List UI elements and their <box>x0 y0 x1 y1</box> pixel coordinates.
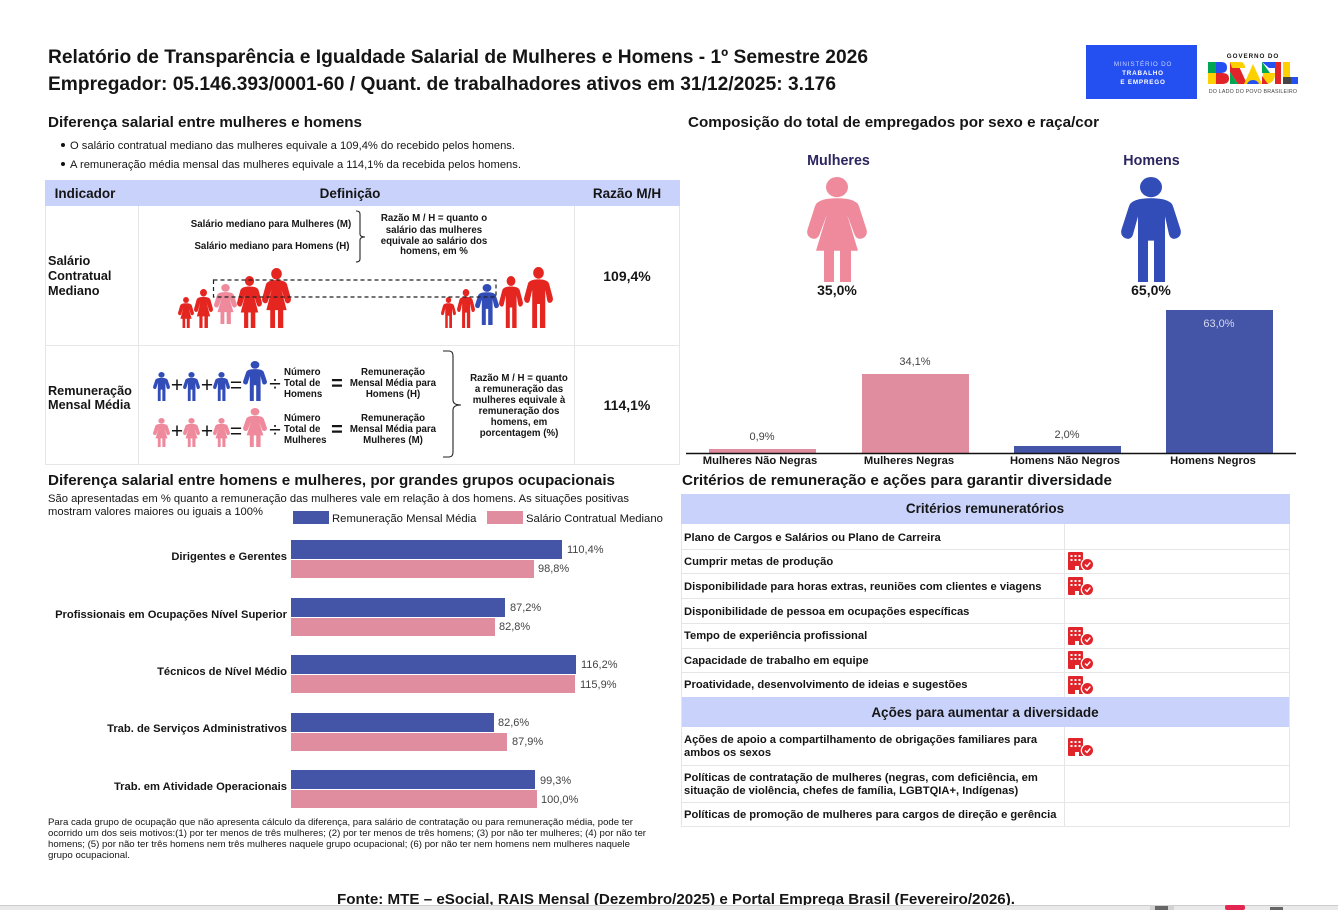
formula: homens: Remuneração <box>361 367 425 378</box>
formula: mulheres: + <box>171 420 183 443</box>
group: profissionais: Profissionais em Ocupações Nível Superior <box>55 609 288 621</box>
pictogram: mulheres 35,0%: Mulheres <box>807 153 870 169</box>
row label: salário contratual mediano: Mediano <box>48 284 100 298</box>
group: dirigentes e gerentes: Dirigentes e Gerentes <box>171 551 287 563</box>
bar chart: composição por raça/cor: Mulheres Não Negras <box>703 455 817 467</box>
legend: Remuneração Mensal Média <box>332 513 477 525</box>
formula: homens: + <box>201 374 213 397</box>
formula: homens: = <box>230 374 242 397</box>
formula: homens: Homens <box>284 389 322 400</box>
row label: remuneração mensal média: Remuneração <box>48 384 132 398</box>
group: dirigentes e gerentes: 98,8% <box>538 563 569 575</box>
formula: homens: Mensal Média para <box>350 378 437 389</box>
group: atividade operacionais <box>114 770 579 808</box>
group: atividade operacionais: 99,3% <box>540 775 571 787</box>
group: serviços administrativos <box>107 713 543 751</box>
pictogram: homens 65,0%: 65,0% <box>1131 282 1171 298</box>
bar chart: composição por raça/cor: 63,0% <box>1203 318 1235 330</box>
list: ações: Políticas de promoção de mulheres para cargos de direção e gerência <box>684 809 1057 821</box>
list: ações: Políticas de contratação de mulheres (negras, com deficiência, em <box>684 772 1038 784</box>
subheading: critérios remuneratórios: Critérios remuneratórios <box>906 501 1064 516</box>
title <box>48 46 868 95</box>
formula: homens: Número <box>284 367 321 378</box>
icons: critérios <box>1068 552 1094 695</box>
bar chart: composição por raça/cor: Mulheres Negras <box>864 455 954 467</box>
group: técnicos: 116,2% <box>581 659 618 671</box>
diagram: mediana das mulheres e homens <box>178 267 553 328</box>
bar chart: composição por raça/cor: Homens Não Negros <box>1010 455 1120 467</box>
formula: mulheres: Mulheres <box>284 435 327 446</box>
legend: Salário Contratual Mediano <box>526 513 663 525</box>
logo: Ministério do Trabalho e Emprego: MINISTÉRIO DO <box>1114 59 1172 68</box>
bar chart: composição por raça/cor <box>686 310 1296 467</box>
list: critérios: Cumprir metas de produção <box>684 556 833 568</box>
bar chart: composição por raça/cor: 2,0% <box>1054 429 1080 441</box>
bar chart: composição por raça/cor: 0,9% <box>749 431 775 443</box>
description: São apresentadas em % quanto a remuneração das mulheres vale em relação à dos homens. As situações positivas <box>48 493 629 505</box>
logo: Governo do Brasil: DO LADO DO POVO BRASILEIRO <box>1209 89 1297 95</box>
table: indicadores: Razão M/H <box>593 186 661 201</box>
group: dirigentes e gerentes <box>171 540 604 578</box>
brace and explanation <box>443 351 568 457</box>
icon: ações <box>1068 738 1094 757</box>
list: ações: Ações de apoio a compartilhamento de obrigações familiares para <box>684 734 1038 746</box>
definition: salário mediano: equivale ao salário dos <box>381 236 487 247</box>
group: técnicos: 115,9% <box>580 679 617 691</box>
list: critérios: Tempo de experiência profissional <box>684 630 867 642</box>
heading: grandes grupos ocupacionais: Diferença salarial entre homens e mulheres, por grandes grupos ocupacionais <box>48 472 615 489</box>
brace and explanation: homens, em <box>491 417 548 428</box>
title: Relatório de Transparência e Igualdade Salarial de Mulheres e Homens - 1º Semestre 2026 <box>48 46 868 68</box>
value: 109,4%: 109,4% <box>603 268 651 284</box>
group: profissionais: 82,8% <box>499 621 530 633</box>
bar chart: grupos ocupacionais <box>55 540 618 808</box>
list: critérios: Capacidade de trabalho em equipe <box>684 655 869 667</box>
definition: salário mediano: Salário mediano para Homens (H) <box>194 241 350 252</box>
table: critérios e ações <box>681 494 1290 826</box>
row label: salário contratual mediano: Contratual <box>48 269 111 283</box>
row label: remuneração mensal média: Mensal Média <box>48 398 131 412</box>
list: ações: situação de violência, chefes de família, LGBTQIA+, Indígenas) <box>684 785 1018 797</box>
list: critérios: Disponibilidade para horas extras, reuniões com clientes e viagens <box>684 581 1042 593</box>
footnote: grupo ocupacional. <box>48 850 130 861</box>
footnote: Para cada grupo de ocupação que não apresenta cálculo da diferença, para salário de contratação ou para remuneração média, pode ter <box>48 817 633 828</box>
pictogram: homens 65,0%: Homens <box>1123 153 1180 169</box>
formula: mulheres: Número <box>284 413 321 424</box>
source: Fonte: MTE – eSocial, RAIS Mensal (Dezembro/2025) e Portal Emprega Brasil (Fevereiro/2026). <box>337 891 1015 908</box>
logo: Ministério do Trabalho e Emprego: E EMPREGO <box>1120 79 1166 86</box>
description: mostram valores maiores ou iguais a 100% <box>48 506 263 518</box>
pictogram: homens 65,0% <box>1121 153 1181 298</box>
group: técnicos <box>157 655 618 693</box>
value: 114,1%: 114,1% <box>604 397 651 413</box>
heading: critérios: Critérios de remuneração e ações para garantir diversidade <box>682 472 1112 489</box>
formula: homens <box>153 361 437 401</box>
list: critérios: Disponibilidade de pessoa em ocupações específicas <box>684 606 969 618</box>
table: indicadores: Indicador <box>55 186 116 201</box>
footnote: ocorrido um dos seis motivos:(1) por ter menos de três mulheres; (2) por ter menos de três homens; (3) por não ter mulheres; (4) por não ter <box>48 828 646 839</box>
formula: mulheres: Mulheres (M) <box>363 435 423 446</box>
group: atividade operacionais: Trab. em Atividade Operacionais <box>114 781 287 793</box>
bottom bar <box>0 905 1338 910</box>
brace and explanation: remuneração dos <box>479 406 559 417</box>
group: serviços administrativos: Trab. de Serviços Administrativos <box>107 723 287 735</box>
bullet list: O salário contratual mediano das mulheres equivale a 109,4% do recebido pelos homens. <box>70 140 515 152</box>
definition: salário mediano: homens, em % <box>400 246 468 257</box>
brace and explanation: Razão M / H = quanto <box>470 373 568 384</box>
formula: mulheres: = <box>331 419 343 441</box>
formula: mulheres: Mensal Média para <box>350 424 437 435</box>
table: indicadores <box>45 180 680 464</box>
brace and explanation: mulheres equivale à <box>473 395 566 406</box>
footnote <box>48 817 646 861</box>
group: serviços administrativos: 87,9% <box>512 736 543 748</box>
footnote: homens; (5) por não ter três homens nem três mulheres naquele grupo ocupacional; (6) por não ter nem homens nem mulheres naquele <box>48 839 630 850</box>
bullet list <box>61 140 521 171</box>
group: profissionais: 87,2% <box>510 602 541 614</box>
logo: Ministério do Trabalho e Emprego: TRABALHO <box>1122 70 1164 77</box>
title: Empregador: 05.146.393/0001-60 / Quant. de trabalhadores ativos em 31/12/2025: 3.176 <box>48 73 836 95</box>
row label: remuneração mensal média <box>48 384 132 412</box>
pictogram: mulheres 35,0% <box>807 153 870 298</box>
formula: mulheres: + <box>201 420 213 443</box>
list: ações: ambos os sexos <box>684 747 771 759</box>
list: critérios: Plano de Cargos e Salários ou Plano de Carreira <box>684 532 942 544</box>
row label: salário contratual mediano <box>48 254 111 298</box>
subheading: ações: Ações para aumentar a diversidade <box>871 705 1099 720</box>
definition: salário mediano: salário das mulheres <box>386 225 482 236</box>
legend <box>293 511 663 525</box>
formula: homens: + <box>171 374 183 397</box>
formula: homens: Total de <box>284 378 321 389</box>
definition: salário mediano: Razão M / H = quanto o <box>381 213 487 224</box>
heading: diferença salarial: Diferença salarial entre mulheres e homens <box>48 114 362 131</box>
logo: Governo do Brasil: GOVERNO DO <box>1227 53 1279 60</box>
logo: Ministério do Trabalho e Emprego <box>1086 45 1197 99</box>
description <box>48 493 629 518</box>
group: profissionais <box>55 598 541 636</box>
table: indicadores: Definição <box>320 186 380 201</box>
bar chart: composição por raça/cor: Homens Negros <box>1170 455 1256 467</box>
formula: mulheres: = <box>230 420 242 443</box>
group: atividade operacionais: 100,0% <box>541 794 579 806</box>
bullet list: A remuneração média mensal das mulheres equivale a 114,1% da recebida pelos homens. <box>70 159 521 171</box>
list: ações <box>684 734 1057 821</box>
pictogram: mulheres 35,0%: 35,0% <box>817 282 857 298</box>
heading: composição: Composição do total de empregados por sexo e raça/cor <box>688 114 1099 131</box>
definition: salário mediano: Salário mediano para Mulheres (M) <box>191 219 351 230</box>
group: dirigentes e gerentes: 110,4% <box>567 544 604 556</box>
logo: Governo do Brasil <box>1208 53 1298 95</box>
formula: homens: ÷ <box>269 373 281 396</box>
bar chart: composição por raça/cor: 34,1% <box>899 356 931 368</box>
formula: mulheres: Remuneração <box>361 413 425 424</box>
list: critérios <box>684 532 1042 691</box>
formula: homens: = <box>331 373 343 395</box>
formula: mulheres: ÷ <box>269 419 281 442</box>
row label: salário contratual mediano: Salário <box>48 254 91 268</box>
group: serviços administrativos: 82,6% <box>498 717 529 729</box>
formula: homens: Homens (H) <box>366 389 420 400</box>
formula: mulheres <box>153 408 437 447</box>
list: critérios: Proatividade, desenvolvimento de ideias e sugestões <box>684 679 968 691</box>
group: técnicos: Técnicos de Nível Médio <box>157 666 287 678</box>
brace and explanation: a remuneração das <box>475 384 563 395</box>
definition: salário mediano <box>191 211 487 262</box>
formula: mulheres: Total de <box>284 424 321 435</box>
brace and explanation: porcentagem (%) <box>480 428 558 439</box>
